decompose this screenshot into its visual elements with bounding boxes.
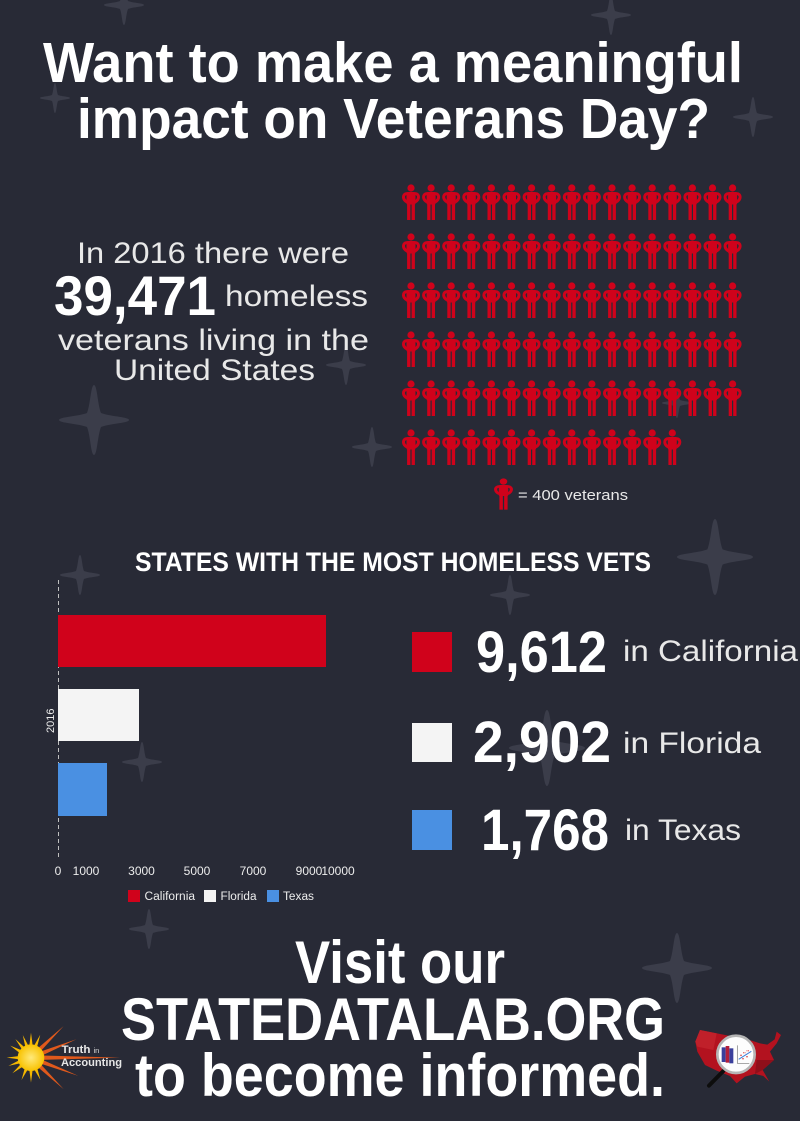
stat: Texas [412,798,741,863]
stat: Florida: in Florida [623,727,761,760]
magnifier lens [717,1036,755,1073]
chart legend: Texas [283,891,314,903]
stat: Florida [412,710,761,775]
logo: State Data Lab map and magnifier [695,1030,781,1086]
stat: Florida: 2,902 [473,710,611,775]
homeless veterans statement: In 2016 there were [77,237,349,270]
stat: Texas: 1,768 [481,798,609,863]
axis ticks [55,864,355,878]
logo: Truth in Accounting: in [94,1046,99,1055]
bar: Texas [58,763,107,816]
chart heading: STATES WITH THE MOST HOMELESS VETS [135,547,651,577]
pictogram key [496,478,628,510]
axis ticks: 1000 [73,864,100,878]
axis ticks: 10000 [321,864,355,878]
statistic: 39,471: 39,471 [54,264,216,327]
bar chart [45,580,355,903]
call to action: Visit our [295,929,505,996]
stat: California: in California [623,635,798,668]
stat: Texas: in Texas [625,814,741,847]
axis ticks: 0 [55,864,62,878]
chart legend [128,890,314,903]
logo: Truth in Accounting: Truth [62,1044,91,1056]
logo: Truth in Accounting [7,1024,122,1091]
call to action [121,929,665,1109]
axis ticks: 7000 [240,864,267,878]
axis ticks: 9000 [296,864,323,878]
homeless veterans statement [54,237,369,387]
magnifier handle [709,1071,723,1086]
bar: Florida [58,689,139,741]
logo: Truth in Accounting: Accounting [61,1057,122,1069]
chart legend: Florida [220,891,257,903]
axis label: year: 2016 [45,709,57,733]
US map [695,1030,781,1083]
pictogram: rows of veterans [403,184,740,465]
axis ticks: 5000 [184,864,211,878]
magnifier bars [722,1047,726,1062]
call to action: to become informed. [135,1042,665,1109]
chart legend: California [144,891,196,903]
pictogram key: = 400 veterans [518,487,628,504]
axis ticks: 3000 [128,864,155,878]
homeless veterans statement: homeless [225,280,368,313]
homeless veterans statement: United States [114,354,315,387]
title: Want to make a meaningful [43,31,743,95]
bar: California [58,615,326,667]
magnifier scatter [737,1045,749,1063]
stat: California [412,620,798,685]
title [43,31,743,151]
stat: California: 9,612 [476,620,607,685]
title: impact on Veterans Day? [77,87,710,151]
call to action: STATEDATALAB.ORG [121,986,665,1053]
homeless veterans statement: veterans living in the [58,324,369,357]
